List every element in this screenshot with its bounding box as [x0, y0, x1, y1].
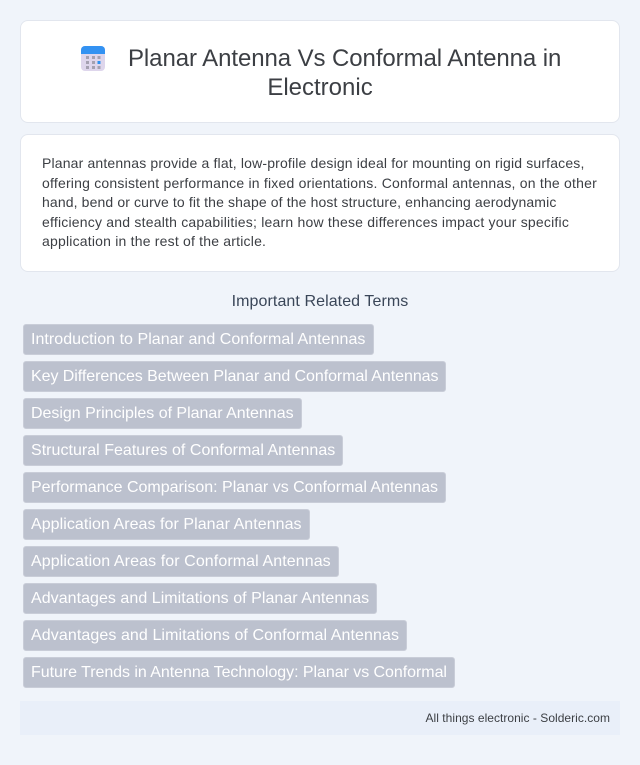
footer text: All things electronic - Solderic.com [426, 711, 610, 725]
term 3: Design Principles of Planar Antennas [31, 405, 294, 422]
term 2: Key Differences Between Planar and Conformal Antennas [31, 368, 438, 385]
term 1 [23, 324, 374, 355]
title: Electronic [267, 74, 373, 101]
term 1: Introduction to Planar and Conformal Antennas [31, 331, 365, 348]
intro text: application in the rest of the article. [42, 233, 266, 249]
intro text: efficiency and stealth capabilities; learn how these differences impact your specific [42, 214, 569, 230]
term 4: Structural Features of Conformal Antennas [31, 442, 335, 459]
term 7 [23, 546, 339, 577]
term 7: Application Areas for Conformal Antennas [31, 553, 331, 570]
related terms heading: Important Related Terms [232, 293, 408, 310]
intro card [20, 134, 620, 272]
term 10 [23, 657, 455, 688]
term 2 [23, 361, 446, 392]
intro text: Planar antennas provide a flat, low-profile design ideal for mounting on rigid surfaces, [42, 155, 584, 171]
term 10: Future Trends in Antenna Technology: Planar vs Conformal [31, 664, 447, 681]
footer bar [20, 701, 620, 735]
icon: calendar [81, 46, 105, 71]
intro text [42, 155, 597, 249]
term 8: Advantages and Limitations of Planar Antennas [31, 590, 369, 607]
term 9 [23, 620, 407, 651]
term 8 [23, 583, 377, 614]
term 5 [23, 472, 446, 503]
term 9: Advantages and Limitations of Conformal Antennas [31, 627, 399, 644]
term 3 [23, 398, 302, 429]
title: Planar Antenna Vs Conformal Antenna in [128, 45, 561, 72]
term 4 [23, 435, 343, 466]
header card [20, 20, 620, 123]
term 5: Performance Comparison: Planar vs Conformal Antennas [31, 479, 438, 496]
intro text: offering consistent performance in fixed orientations. Conformal antennas, on the other [42, 174, 597, 190]
intro text: hand, bend or curve to fit the shape of the host structure, enhancing aerodynamic [42, 194, 556, 210]
term 6: Application Areas for Planar Antennas [31, 516, 302, 533]
term list [23, 324, 455, 688]
title [128, 45, 561, 101]
term 6 [23, 509, 310, 540]
